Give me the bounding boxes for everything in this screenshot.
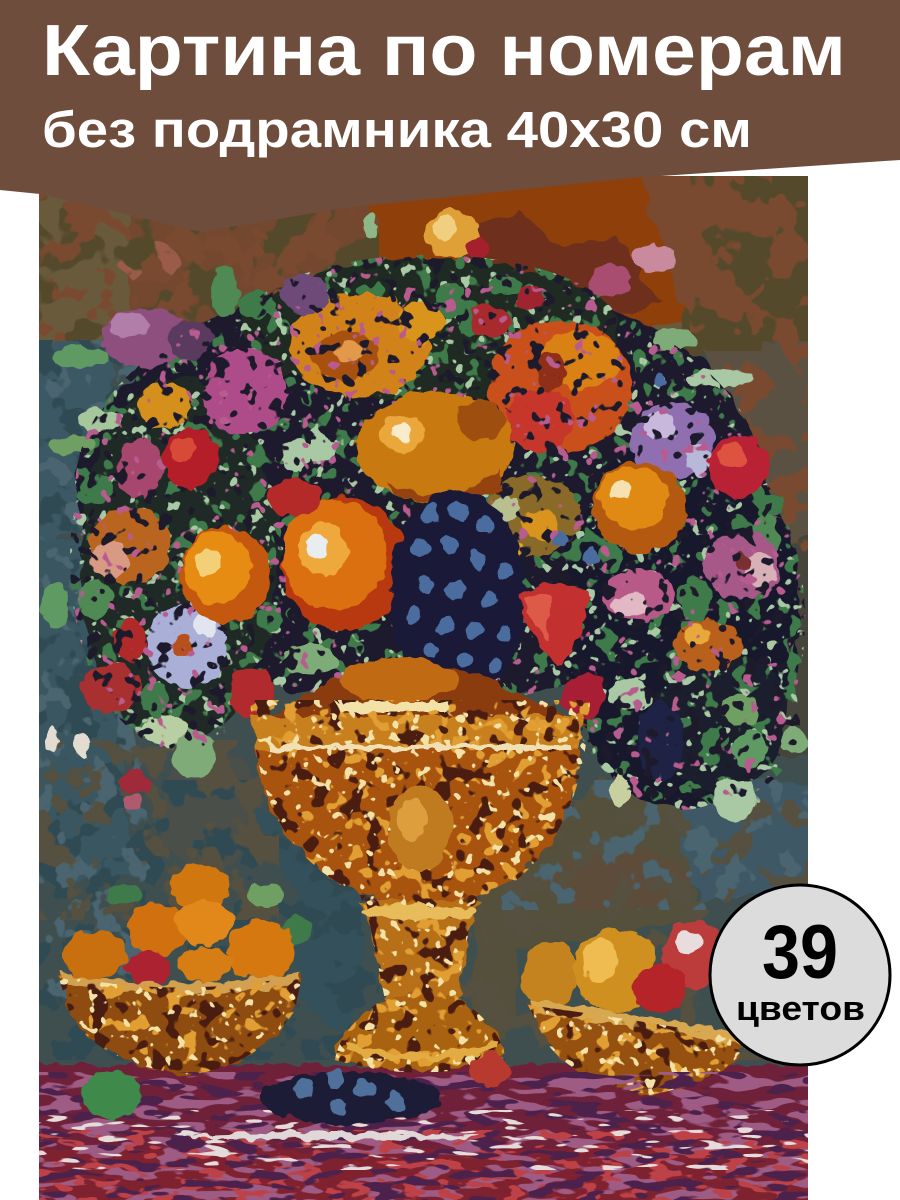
right bowl	[522, 920, 750, 1095]
vase medallion	[388, 786, 452, 870]
right bowl fruits	[522, 920, 727, 1012]
flower: orange top	[290, 293, 444, 397]
flower: red left	[82, 618, 146, 712]
petals: white left	[46, 727, 91, 759]
flower: lavender	[146, 603, 226, 687]
flower: top gold	[424, 210, 490, 258]
left bowl	[58, 863, 302, 1075]
fruit: big orange	[282, 497, 408, 631]
flowers: small red top	[470, 286, 544, 336]
right bowl body	[528, 1005, 750, 1095]
dark flower right	[636, 700, 684, 780]
painting	[20, 160, 830, 1200]
flecks over flowers	[70, 255, 805, 810]
flower cluster: purple left	[101, 275, 329, 368]
table cloth	[39, 1054, 808, 1200]
flower cluster: orange left	[90, 507, 170, 583]
painting background	[20, 160, 830, 1200]
grapes	[390, 372, 666, 700]
fruit: red apple right	[709, 435, 769, 499]
badge number: 39	[762, 910, 838, 995]
bowl ornament texture	[50, 970, 760, 1100]
vase	[240, 658, 600, 1090]
fruits	[162, 372, 769, 719]
vase bowl	[256, 750, 578, 906]
vase top	[250, 662, 590, 730]
flower: orange cluster right	[674, 619, 742, 671]
title: Картина по номерам	[42, 11, 846, 91]
fruit: reds	[267, 480, 323, 516]
flower: pink top right	[588, 244, 677, 296]
badge label: цветов	[736, 990, 865, 1028]
flower: pink right	[704, 531, 780, 599]
bouquet dark mass	[70, 255, 805, 810]
flower: lilac right	[630, 402, 714, 478]
leaves	[41, 212, 811, 944]
vase stem	[360, 900, 480, 1000]
flower: pink	[203, 348, 287, 436]
vase ornament texture	[240, 690, 600, 1090]
vase foot	[335, 995, 505, 1070]
left bowl fruits	[62, 863, 296, 984]
flowers	[46, 210, 780, 809]
left bowl body	[58, 975, 302, 1075]
badge: 39 colours	[710, 885, 890, 1065]
fruit: right orange	[593, 461, 687, 553]
fruit: left pear	[180, 527, 270, 623]
flower: red-orange	[488, 319, 632, 452]
leaves on table	[82, 1071, 142, 1119]
banner shape	[0, 0, 900, 232]
banner	[0, 0, 900, 232]
flower: gold and green centre	[484, 476, 580, 562]
fruit: red apple left	[162, 428, 218, 488]
flower: red low left	[119, 770, 151, 809]
fruit: strawberry	[518, 582, 590, 668]
flower: pink centre right	[604, 569, 676, 621]
subtitle: без подрамника 40х30 см	[42, 101, 752, 158]
vase rim	[250, 715, 585, 755]
fruit: top orange	[356, 392, 514, 502]
grapes on table	[260, 1069, 440, 1124]
